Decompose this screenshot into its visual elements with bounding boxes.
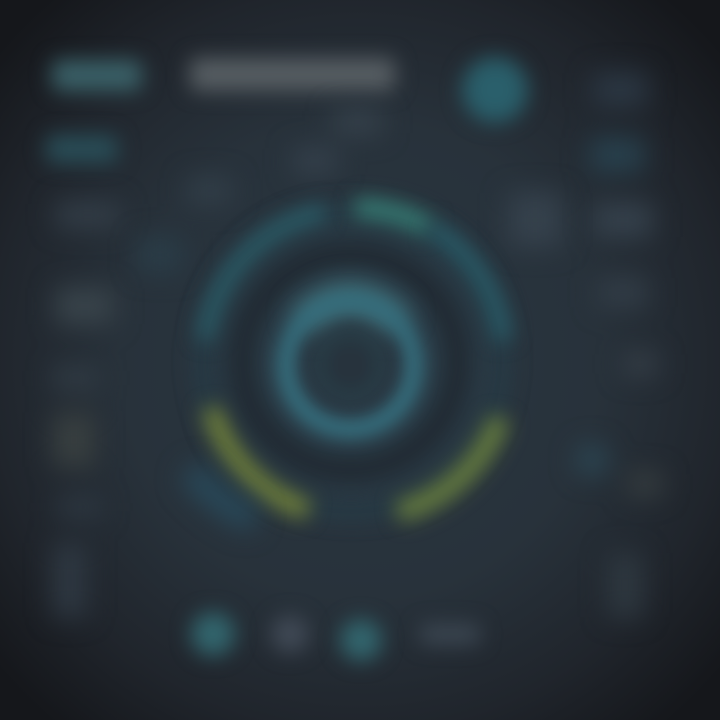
header badge bbox=[52, 60, 142, 91]
legend icon 1 bbox=[191, 612, 235, 656]
inner teal ring bbox=[286, 301, 414, 429]
left column blocks bbox=[53, 203, 120, 617]
bottom legend bbox=[191, 612, 480, 661]
green arc lower right bbox=[398, 418, 500, 512]
outer teal arc right bbox=[432, 228, 503, 340]
left sub-heading block bbox=[46, 135, 118, 163]
outer teal arc left bbox=[206, 212, 325, 340]
upper middle faint labels bbox=[138, 110, 562, 272]
legend icon 2 bbox=[271, 615, 309, 653]
legend label bbox=[420, 624, 480, 644]
glow behind chart bbox=[252, 260, 452, 460]
inner top highlight bbox=[302, 298, 400, 325]
header circle icon bbox=[462, 57, 528, 123]
outer ring base bbox=[202, 212, 502, 512]
outer green-teal arc top bbox=[355, 208, 430, 228]
green arc lower left bbox=[212, 408, 308, 510]
blue arc lower left outer bbox=[190, 470, 255, 520]
core disc bbox=[320, 335, 380, 395]
legend icon 3 bbox=[340, 619, 382, 661]
right column blocks bbox=[576, 73, 662, 617]
donut chart bbox=[190, 208, 503, 520]
title bar bbox=[190, 58, 395, 91]
middle dark ring bbox=[242, 254, 458, 470]
